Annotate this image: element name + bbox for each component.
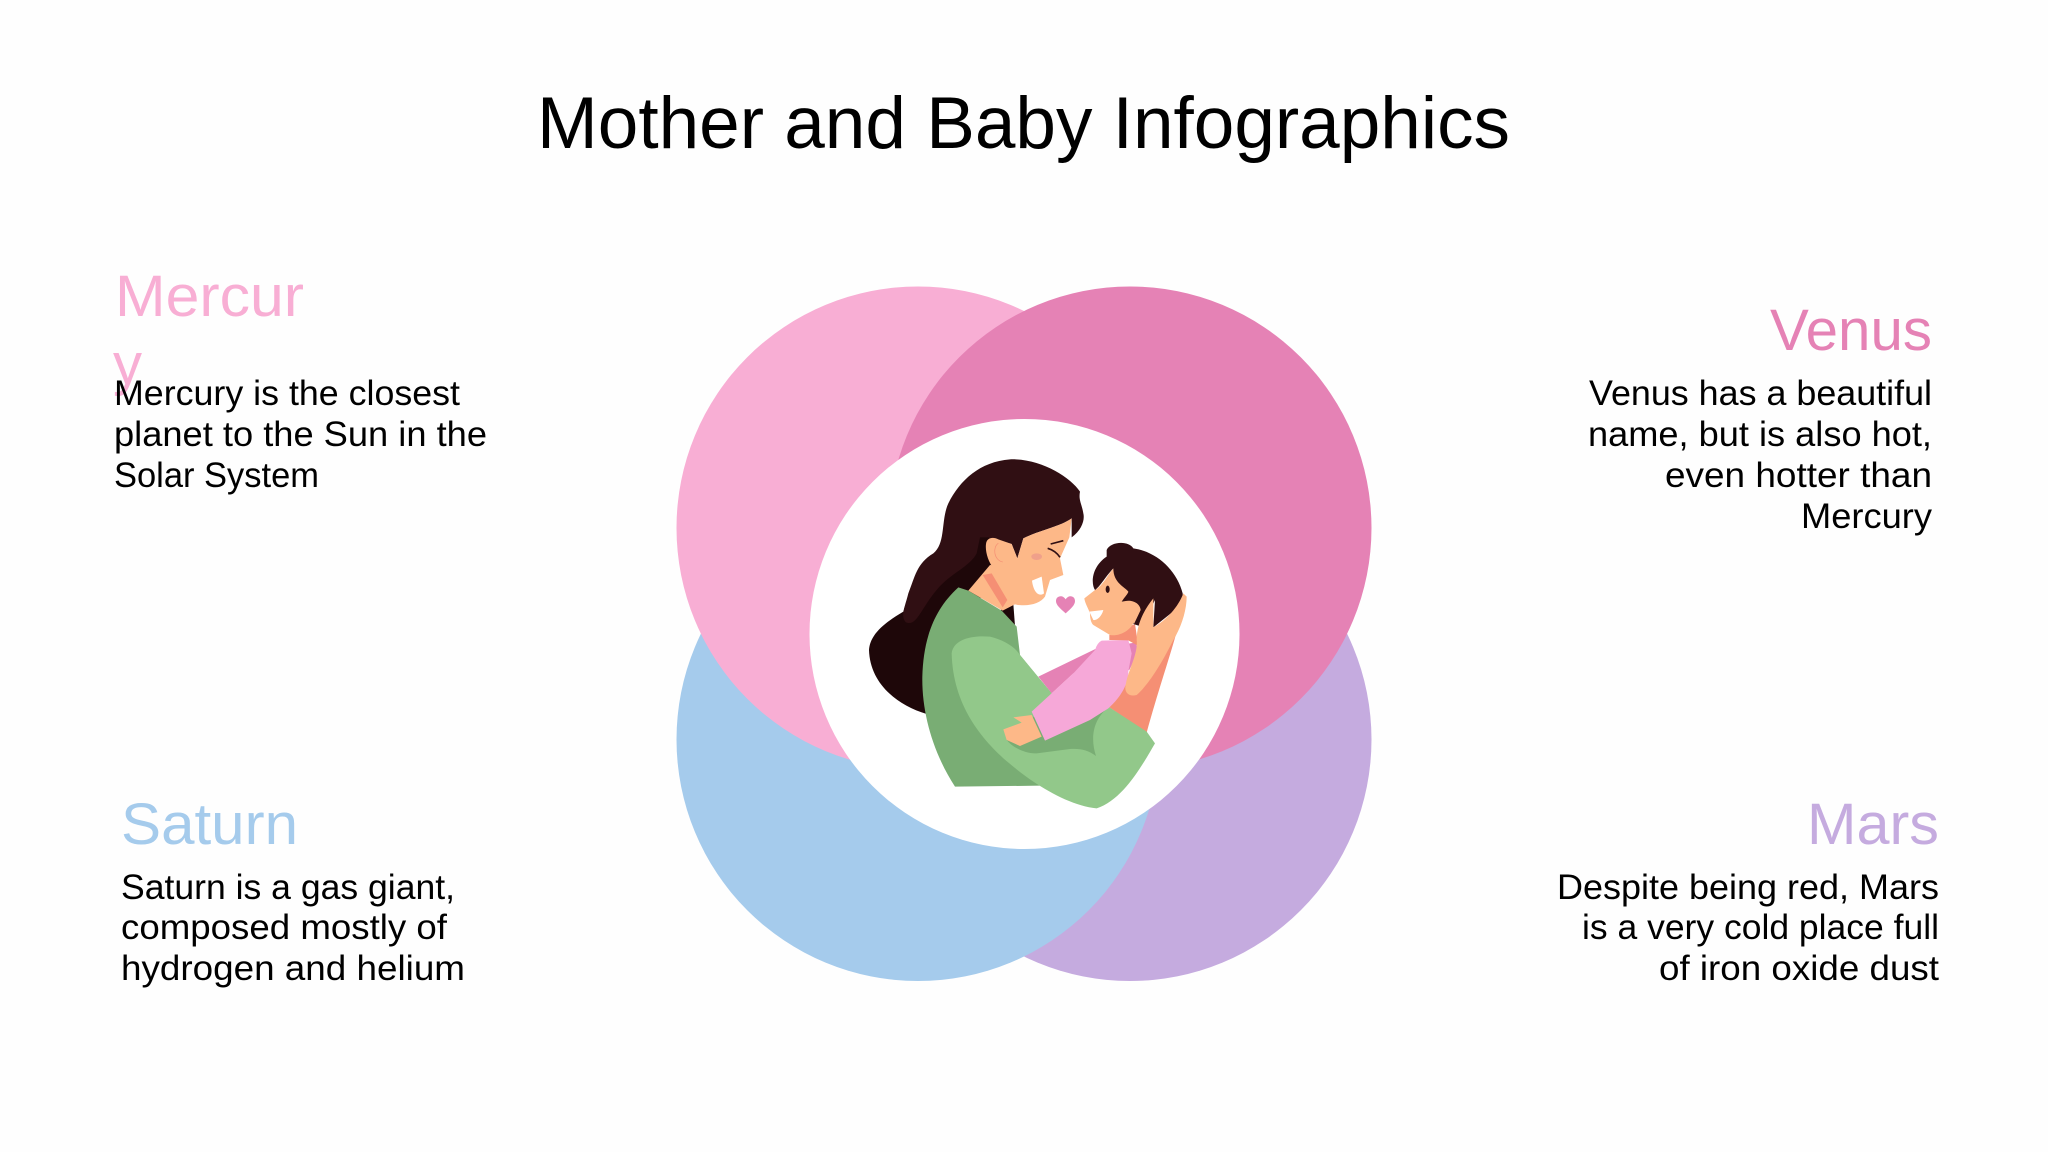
mother's green arm — [952, 636, 1155, 808]
baby hand — [1003, 715, 1042, 746]
circle: center white — [810, 419, 1240, 849]
heading: Venus: Venus — [1770, 298, 1932, 363]
circle: Mars — [888, 498, 1372, 981]
mother's face — [986, 518, 1072, 605]
text: Mars description: of iron oxide dust — [1659, 949, 1939, 988]
baby mouth — [1089, 610, 1103, 620]
circle: Mercury — [676, 286, 1160, 770]
baby shirt — [1032, 640, 1132, 741]
mother's ear — [995, 543, 1003, 562]
text: Saturn description: Saturn is a gas giant, — [121, 868, 455, 907]
text: Venus description: Venus has a beautiful — [1589, 374, 1932, 413]
baby ear — [1122, 601, 1141, 624]
text: Saturn description: hydrogen and helium — [121, 949, 465, 988]
sleeve shadow — [1007, 700, 1109, 756]
heading: Mars: Mars — [1807, 792, 1939, 857]
mother's far arm — [1108, 629, 1177, 733]
diagram: overlapping circles — [676, 286, 1372, 981]
circle: Saturn — [676, 498, 1160, 981]
title: Mother and Baby Infographics — [537, 83, 1510, 164]
baby eye — [1106, 586, 1110, 593]
heading: Mercury: y — [113, 332, 142, 397]
mother's hand on baby head — [1125, 593, 1187, 696]
mother's neck — [968, 565, 1020, 611]
text: Venus description: Mercury — [1801, 497, 1933, 536]
heading: Mercury — [113, 264, 304, 397]
text: Mars description — [1557, 868, 1939, 988]
text: Saturn description — [121, 868, 465, 988]
text: Mars description: Despite being red, Mars — [1557, 868, 1939, 907]
panel: Venus — [1588, 298, 1933, 536]
text: Mercury description — [114, 374, 487, 495]
panel: Mars — [1557, 792, 1939, 988]
text: Saturn description: composed mostly of — [121, 908, 447, 947]
text: Mercury description: planet to the Sun in the — [114, 415, 487, 454]
heading: Saturn: Saturn — [121, 792, 298, 857]
illustration: mother holding baby — [869, 459, 1187, 808]
text: Mercury description: Solar System — [114, 456, 319, 495]
mother's eye — [1048, 541, 1063, 557]
panel: Mercury — [113, 264, 487, 495]
baby neck — [1109, 624, 1138, 646]
text: Mercury description: Mercury is the closest — [114, 374, 460, 413]
mother's hair — [869, 459, 1084, 714]
mother's neck shadow — [983, 573, 1007, 607]
text: Venus description: even hotter than — [1665, 456, 1932, 495]
heading: Mercury: Mercur — [115, 264, 304, 329]
text: Venus description — [1588, 374, 1933, 536]
baby hair — [1093, 543, 1183, 627]
text: Venus description: name, but is also hot, — [1588, 415, 1932, 454]
heart — [1056, 596, 1075, 613]
text: Mars description: is a very cold place full — [1582, 908, 1939, 947]
baby shirt back — [1038, 643, 1139, 693]
circle: Venus — [888, 286, 1372, 770]
mother's cheek — [1031, 553, 1042, 560]
baby face — [1084, 567, 1148, 635]
mother's green body — [922, 587, 1108, 787]
panel: Saturn — [121, 792, 465, 988]
mother's mouth — [1032, 577, 1044, 595]
